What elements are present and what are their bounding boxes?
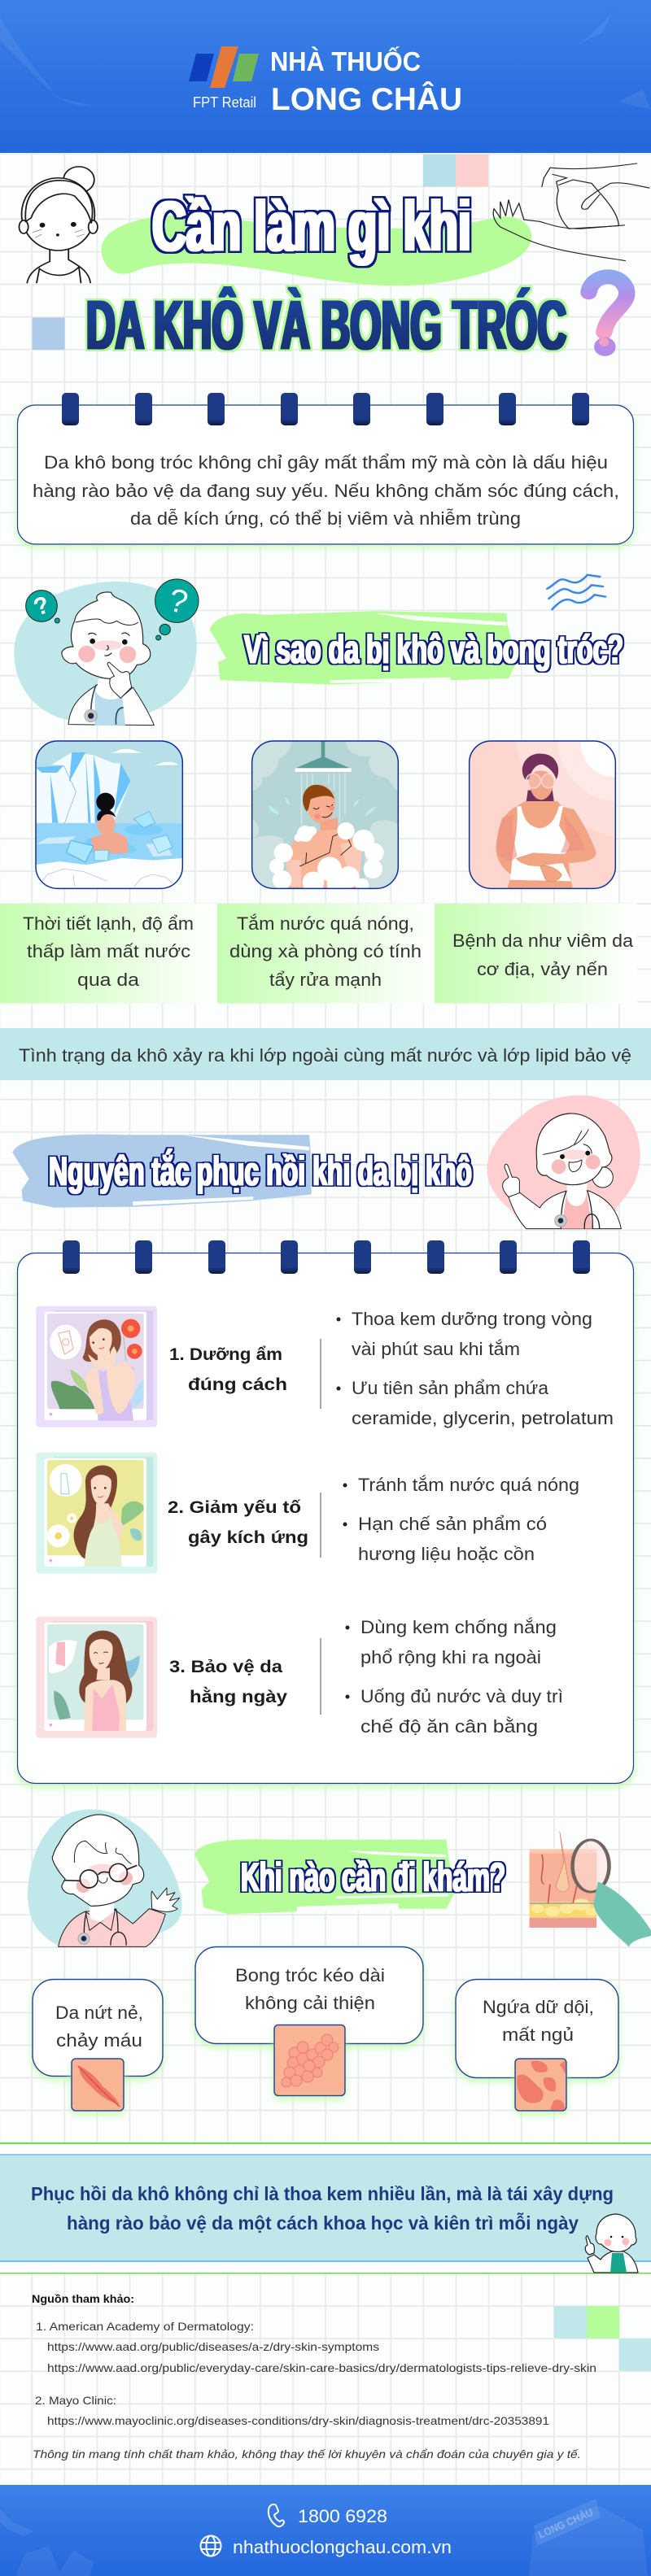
logo FPT <box>189 46 259 111</box>
intro text <box>33 452 619 529</box>
icon: small doctor <box>585 2214 638 2273</box>
symptom card: cracked skin: Da nứt nẻ, <box>55 2003 143 2023</box>
step 1 label <box>169 1345 287 1394</box>
step 3 daily protection <box>36 1617 563 1738</box>
cause 1: Thời tiết lạnh, độ ẩm <box>23 913 194 934</box>
rash image <box>515 2059 566 2111</box>
icon: phone <box>269 2504 284 2526</box>
cause 2: Tắm nước quá nóng, <box>237 913 414 934</box>
store watermark: LONG CHÂU <box>536 2506 595 2541</box>
icon: girl with dry skin line art <box>19 167 98 283</box>
symptom card: prolonged peeling: không cải thiện <box>245 1993 375 2013</box>
icon: skin cross-section under magnifier <box>530 1832 651 1946</box>
brand name: LONG CHÂU <box>271 81 462 117</box>
step 3 bullets: Uống đủ nước và duy trì <box>360 1686 563 1706</box>
references: https://www.aad.org/public/diseases/a-z/dry-skin-symptoms <box>47 2340 379 2353</box>
step 2 label <box>168 1498 308 1547</box>
symptom card: prolonged peeling <box>195 1947 423 2095</box>
illustration: girl in pink, rose frame: ♥ <box>49 1721 53 1728</box>
references: https://www.mayoclinic.org/diseases-conditions/dry-skin/diagnosis-treatment/drc-20353891 <box>47 2414 549 2427</box>
callout: lipid banner: Tình trạng da khô xảy ra khi lớp ngoài cùng mất nước và lớp lipid bảo vệ <box>19 1045 631 1066</box>
panel: recovery notebook card <box>18 1240 633 1783</box>
illustration: girl in pink, rose frame <box>36 1617 157 1738</box>
cause 2: tẩy rửa mạnh <box>269 970 382 990</box>
references: 1. American Academy of Dermatology: <box>36 2320 254 2333</box>
image: cold weather ice bath <box>35 741 183 889</box>
step 3 bullets <box>345 1617 563 1737</box>
rash image <box>72 2059 124 2111</box>
step 1 bullets: ceramide, glycerin, petrolatum <box>352 1408 614 1428</box>
panel: intro notebook card <box>18 393 633 544</box>
callout: conclusion banner <box>0 2142 651 2274</box>
icon: pointing doctor <box>487 1096 640 1229</box>
references: https://www.aad.org/public/everyday-care/skin-care-basics/dry/dermatologists-tips-relieve-dry-skin <box>47 2361 596 2374</box>
section heading: when to see a doctor: Khi nào cần đi khám? <box>241 1855 505 1900</box>
step 1 moisturize <box>36 1306 614 1428</box>
step 2 label: 2. Giảm yếu tố <box>168 1498 301 1517</box>
step 3 label: hằng ngày <box>190 1687 287 1706</box>
references: Thông tin mang tính chất tham khảo, không thay thế lời khuyên và chẩn đoán của chuyên gia y tế. <box>33 2447 581 2460</box>
phone number: 1800 6928 <box>298 2506 387 2526</box>
footer band <box>0 2485 651 2576</box>
notebook rings <box>63 1240 590 1274</box>
icon: thinking doctor <box>14 579 199 726</box>
callout: conclusion banner: Phục hồi da khô không chỉ là thoa kem nhiều lần, mà là tái xây dựng <box>31 2183 614 2204</box>
title highlight blob <box>101 216 531 285</box>
step 1 label: đúng cách <box>188 1375 287 1394</box>
icon: blue waves <box>547 575 605 609</box>
step 3 label <box>169 1658 287 1706</box>
cause 3: Bệnh da như viêm da <box>452 931 634 951</box>
logo FPT: FPT Retail <box>193 94 256 111</box>
cause 3: cơ địa, vảy nến <box>477 959 608 979</box>
step 1 bullets <box>337 1309 614 1428</box>
rash image <box>274 2025 345 2095</box>
cause 2: dùng xà phòng có tính <box>229 941 422 961</box>
image: hot shower <box>251 741 399 895</box>
icon: thinking doctor: ? <box>30 591 53 621</box>
symptom card: cracked skin: chảy máu <box>56 2030 142 2051</box>
cause 1: qua da <box>77 970 140 990</box>
step 3 label: 3. Bảo vệ da <box>169 1658 282 1676</box>
callout: conclusion banner: hàng rào bảo vệ da một cách khoa học và kiên trì mỗi ngày <box>67 2212 579 2234</box>
step 1 bullets: Thoa kem dưỡng trong vòng <box>352 1309 592 1329</box>
decorative squares bottom <box>554 2306 651 2370</box>
brand name: NHÀ THUỐC <box>270 46 421 76</box>
cause 3 <box>435 904 637 1004</box>
step 2 bullets <box>343 1475 579 1564</box>
references: Nguồn tham khảo: <box>32 2292 134 2305</box>
store watermark <box>529 2499 648 2576</box>
references: 2. Mayo Clinic: <box>35 2394 116 2407</box>
title: Cần làm gì khi <box>152 187 471 266</box>
panel: three causes <box>0 904 637 1004</box>
symptom card: severe itching: Ngứa dữ dội, <box>483 1997 594 2017</box>
step 2 reduce irritants <box>36 1453 579 1574</box>
step 3 bullets: chế độ ăn cân bằng <box>360 1716 538 1737</box>
step 1 bullets: Ưu tiên sản phẩm chứa <box>352 1378 549 1398</box>
intro text: Da khô bong tróc không chỉ gây mất thẩm mỹ mà còn là dấu hiệu <box>44 452 608 473</box>
illustration: girl with cream, lilac frame <box>36 1306 157 1427</box>
image: skin disease rash <box>468 741 616 889</box>
icon: waving doctor with glasses <box>28 1809 182 1946</box>
section heading: when to see a doctor <box>194 1839 505 1914</box>
brand name <box>270 46 462 117</box>
section heading: recovery principles <box>12 1135 472 1208</box>
illustration: girl with long hair, mint frame: ♥ <box>49 1557 53 1564</box>
step 2 bullets: Tránh tắm nước quá nóng <box>358 1475 579 1495</box>
cause 2 <box>217 904 435 1004</box>
icon: 3D question mark <box>588 277 627 356</box>
icon: hands with lotion bottle line art <box>493 163 649 261</box>
symptom card: cracked skin <box>33 1980 163 2111</box>
illustration: girl with long hair, mint frame <box>36 1453 157 1574</box>
title <box>86 187 566 364</box>
callout: lipid banner <box>0 1028 651 1080</box>
step 3 bullets: phổ rộng khi ra ngoài <box>360 1647 541 1667</box>
decorative squares top <box>33 155 488 350</box>
cause 1: thấp làm mất nước <box>27 941 190 961</box>
step 3 bullets: Dùng kem chống nắng <box>360 1617 557 1637</box>
step 2 bullets: Hạn chế sản phẩm có <box>358 1514 547 1534</box>
icon: globe <box>200 2536 221 2556</box>
symptom card: severe itching: mất ngủ <box>502 2025 574 2045</box>
icon: thinking doctor: ? <box>166 582 191 621</box>
step 1 label: 1. Dưỡng ẩm <box>169 1345 282 1364</box>
step 1 bullets: vài phút sau khi tắm <box>352 1339 520 1359</box>
website: nhathuoclongchau.com.vn <box>233 2537 452 2557</box>
section heading: why skin is dry <box>210 611 623 685</box>
intro text: hàng rào bảo vệ da đang suy yếu. Nếu không chăm sóc đúng cách, <box>33 481 619 501</box>
notebook rings <box>62 393 589 425</box>
intro text: da dễ kích ứng, có thể bị viêm và nhiễm trùng <box>130 508 521 529</box>
references <box>32 2292 596 2460</box>
symptom card: severe itching <box>456 1980 618 2111</box>
step 2 bullets: hương liệu hoặc cồn <box>358 1544 535 1564</box>
illustration: girl with cream, lilac frame: ♥ <box>49 1410 53 1418</box>
symptom card: prolonged peeling: Bong tróc kéo dài <box>235 1965 385 1985</box>
cause 1 <box>0 904 217 1004</box>
header band <box>0 0 651 153</box>
step 2 label: gây kích ứng <box>188 1528 308 1547</box>
